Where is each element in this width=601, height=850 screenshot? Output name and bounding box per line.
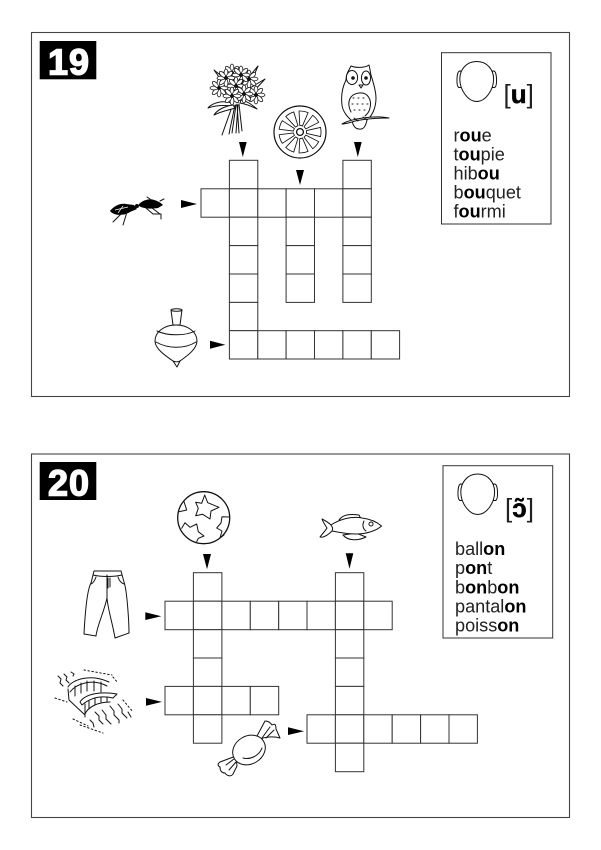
word list: pont (455, 558, 492, 578)
icon: wheel (274, 106, 326, 158)
sound box: [u] (442, 53, 551, 224)
icon: spinning top (155, 309, 197, 367)
arrows: clue pointers (181, 142, 362, 349)
word list: fourmi (454, 202, 506, 222)
word list: poisson (455, 616, 519, 636)
icon: head (458, 474, 498, 514)
word list: ballon (455, 539, 505, 559)
arrows: clue pointers (145, 553, 353, 735)
panel: exercise 19 (32, 32, 570, 396)
panel: exercise 20 (32, 454, 570, 818)
word list: hibou (454, 164, 500, 184)
badge: number 19: 19 (48, 42, 90, 82)
phonetic symbol: [ɔ̃] (505, 493, 534, 523)
icon: bouquet of flowers (208, 64, 265, 135)
word list: pantalon (455, 596, 526, 616)
word list: bonbon (455, 577, 519, 597)
icon: bridge (55, 670, 133, 733)
icon: owl (342, 65, 389, 129)
sound box: [on] (443, 466, 553, 638)
phonetic symbol: [u] (504, 79, 534, 109)
icon: candy (218, 721, 280, 776)
word list: bouquet (454, 183, 521, 203)
badge: number 20: 20 (48, 462, 90, 504)
word list: roue (454, 126, 492, 146)
icon: fish (320, 515, 382, 540)
crossword grid 20 (165, 573, 477, 772)
icon: ball with stars (178, 492, 230, 544)
word list: toupie (454, 144, 505, 164)
icon: trousers (84, 571, 129, 638)
word list (454, 126, 521, 222)
word list (455, 539, 526, 636)
icon: ant (110, 197, 164, 225)
crossword grid 19 (201, 160, 400, 359)
icon: head (457, 62, 497, 102)
